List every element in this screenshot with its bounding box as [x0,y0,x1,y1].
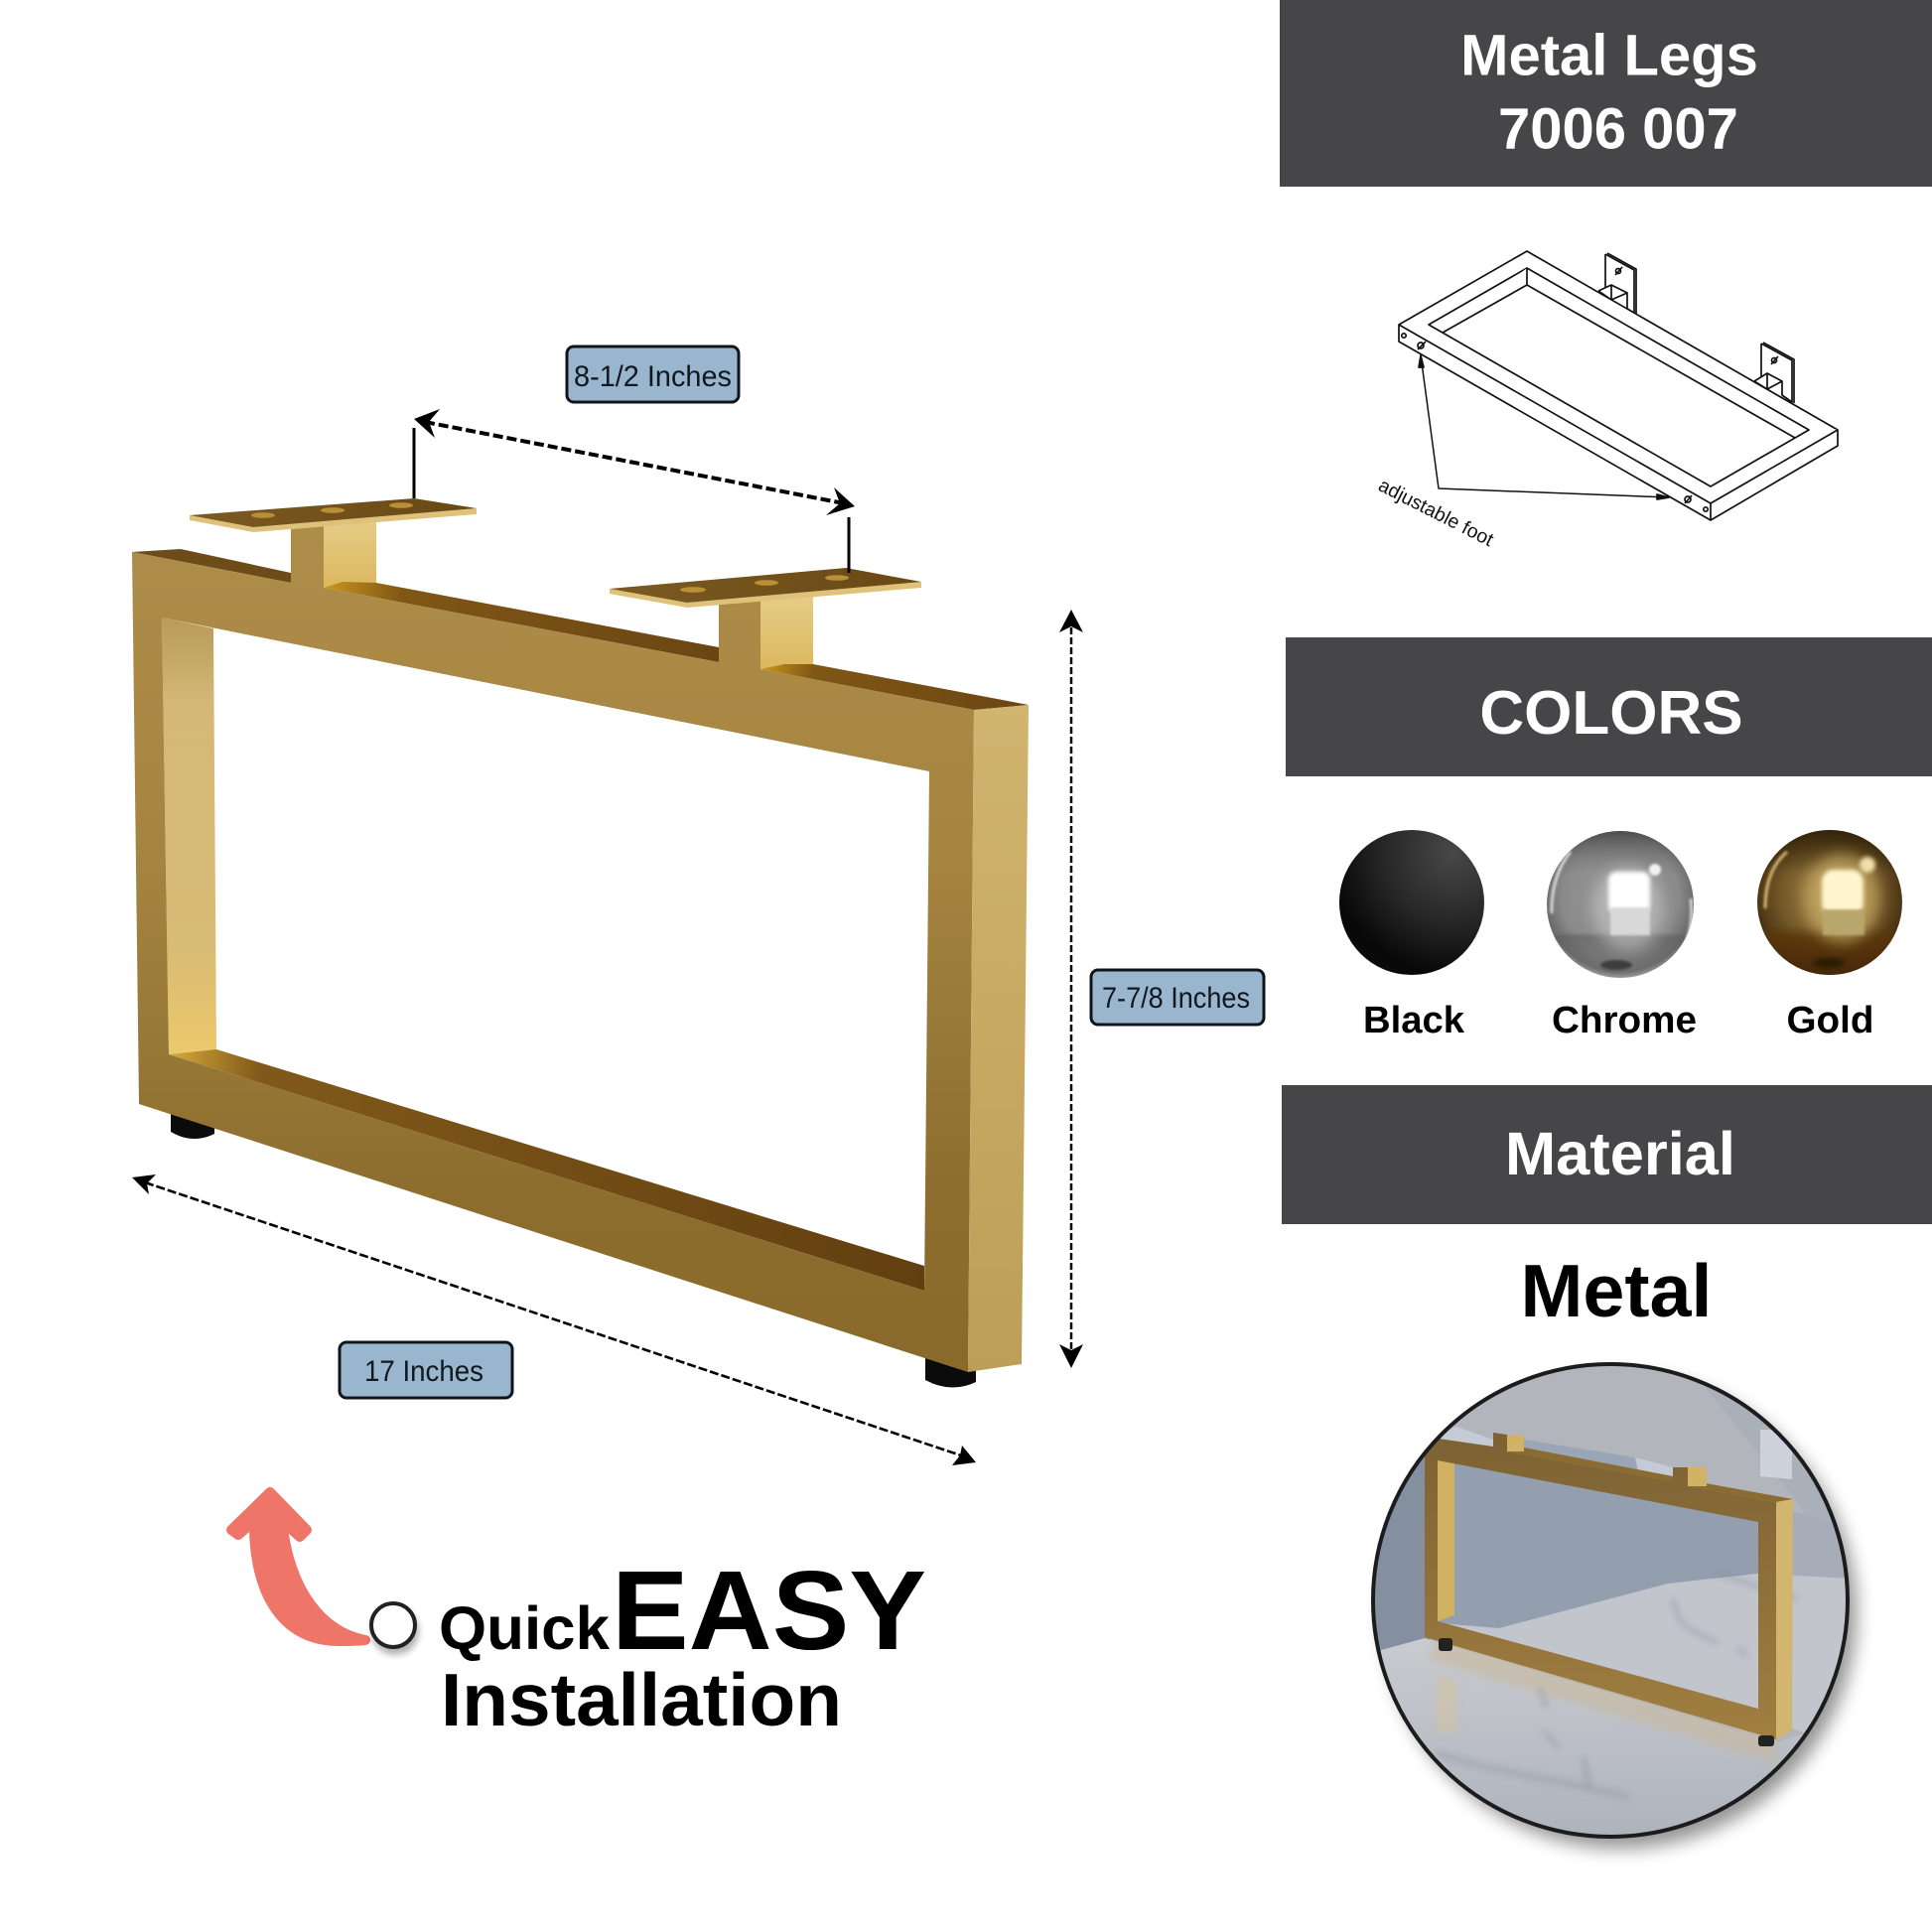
top face left section [132,549,291,583]
heading: Quick EASY Installation: EASY [612,1548,926,1674]
dimension arrow: length [132,1174,976,1465]
photo leg: top faces [1507,1448,1673,1481]
dimension arrow: plate spacing [414,409,855,573]
wall plate 1 [1598,253,1636,314]
text: Metal: Metal [1521,1249,1712,1332]
mounting plate 2 [610,568,921,608]
label: 17 Inches: 17 Inches [364,1355,483,1388]
swatch: chrome ball: Chrome [1552,1000,1697,1041]
swatch: gold ball: Gold [1787,1000,1874,1041]
label: 7-7/8 Inches: 7-7/8 Inches [1102,982,1250,1015]
photo ring border [1373,1364,1848,1837]
icon: ring bullet [371,1603,419,1655]
dimension arrow: height [1059,610,1083,1368]
swatch: black ball: Black [1363,1000,1465,1041]
photo leg: feet [1439,1638,1452,1651]
header bar: COLORS [1286,637,1932,776]
heading: Quick EASY Installation: Quick [439,1594,610,1662]
photo leg: upright faces [1507,1435,1524,1451]
swatch: chrome ball [1547,831,1697,1041]
header bar: Metal Legs 7006 007: 7006 007 [1498,97,1738,161]
label: 8-1/2 Inches: 8-1/2 Inches [574,360,732,393]
photo leg: inner side [1438,1460,1454,1621]
right rubber foot [925,1358,976,1388]
callout text: adjustable foot: adjustable foot [1375,475,1497,551]
heading: Quick EASY Installation [439,1548,926,1741]
photo leg: right side [1776,1499,1793,1739]
label: 17 Inches [340,1342,512,1398]
top face right section [760,664,1029,710]
gold metal leg illustration [132,498,1029,1388]
wall plate 2 [1754,343,1794,403]
header bar: Metal Legs 7006 007: Metal Legs [1460,24,1758,87]
upright 2 side face [760,597,813,669]
marble veins [1435,1574,1797,1797]
icon: curved salmon arrow [231,1492,365,1641]
header bar: COLORS: COLORS [1479,679,1743,748]
photo shadow [1384,1376,1857,1849]
heading: Quick EASY Installation: Installation [441,1658,842,1741]
inner bottom face [169,1049,924,1291]
frame outline [1399,251,1838,520]
top face middle section [324,582,719,662]
photo scene [1370,1360,1852,1847]
upright 1 side face [324,521,376,588]
frame front face [132,526,974,1372]
swatch: gold ball [1757,830,1902,1041]
swatch: black ball [1339,830,1484,1041]
callout arrows [1419,355,1669,499]
header bar: Material: Material [1505,1120,1735,1188]
foot screws [1402,334,1708,511]
header bar: Metal Legs 7006 007 [1280,0,1932,187]
circular room photo [1370,1360,1857,1849]
frame right side face [968,705,1029,1372]
left rubber foot [171,1112,214,1139]
label: 7-7/8 Inches [1091,970,1264,1025]
photo leg: front face [1425,1433,1776,1739]
line drawing: leg with adjustable foot [1399,251,1838,520]
inner left face [162,618,216,1054]
mounting plate 1 [190,498,477,532]
header bar: Material [1282,1085,1932,1224]
label: 8-1/2 Inches [567,346,739,402]
